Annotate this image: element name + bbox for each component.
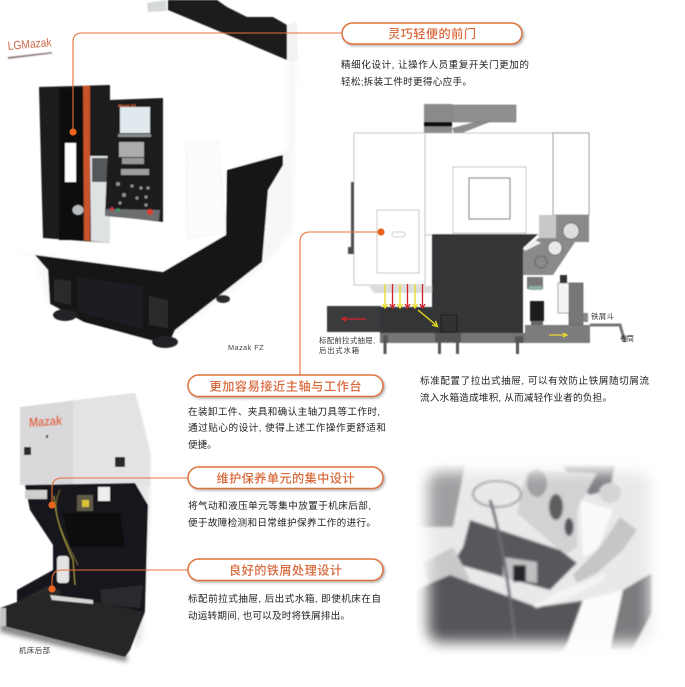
text: access description: 通过贴心的设计, 使得上述工作操作更舒适和: [188, 422, 386, 434]
text: maintenance description: 将气动和液压单元等集中放置于机床后部,: [188, 500, 371, 512]
logo: LGMazak: LGMazak: [7, 35, 53, 53]
connector: chip disposal: [48, 570, 188, 593]
text: access description: 便捷。: [188, 439, 217, 451]
connector: spindle access: [300, 228, 385, 375]
top arm: [424, 104, 516, 133]
tray and body: [327, 234, 538, 343]
flow arrows: [342, 284, 567, 337]
text: maintenance description: 便于故障检测和日常维护保养工作的进行。: [188, 517, 376, 529]
front door window: [39, 85, 110, 243]
diagram labels: 卷筒: [620, 334, 634, 343]
heading: 良好的铁屑处理设计: [188, 559, 383, 580]
heading: 良好的铁屑处理设计: 良好的铁屑处理设计: [229, 562, 342, 578]
cover outline: [354, 133, 589, 285]
diagram labels: 标配前拉式抽屉,: [319, 336, 375, 345]
connector: maintenance unit: [48, 478, 188, 509]
diagram labels: 后出式水箱: [319, 346, 359, 355]
text: drawer description: [420, 375, 649, 404]
text: access description: 在装卸工件、夹具和确认主轴刀具等工作时,: [188, 406, 380, 418]
text: drawer description: 流入水箱造成堆积, 从而减轻作业者的负担。: [420, 392, 612, 404]
heading: 更加容易接近主轴与工作台: [188, 375, 383, 396]
caption: 机床后部: 机床后部: [19, 646, 50, 655]
machine base: [35, 155, 283, 348]
machine photo: rear view: [0, 393, 150, 662]
heading: 维护保养单元的集中设计: [188, 467, 383, 488]
text: chip disposal description: 标配前拉式抽屉, 后出式水箱, 即使机床在自: [188, 593, 381, 605]
filter, motor, tank: [525, 275, 625, 343]
connector: front door: [69, 33, 342, 136]
heading: 灵巧轻便的前门: [342, 23, 522, 44]
text: maintenance description: [188, 500, 376, 529]
photo: operator removing drawer: [415, 460, 660, 655]
diagram labels: [319, 312, 634, 355]
text: drawer description: 标准配置了拉出式抽屉, 可以有效防止铁屑随切屑流: [420, 375, 649, 387]
side diagram of machine: [327, 104, 625, 354]
machine photo: rear view: Mazak: [29, 413, 63, 430]
caption: Mazak FZ: Mazak FZ: [228, 343, 264, 352]
chute: [523, 215, 589, 290]
text: front door description: 轻松;拆装工件时更得心应手。: [341, 76, 472, 88]
heading: 维护保养单元的集中设计: 维护保养单元的集中设计: [216, 470, 354, 486]
text: front door description: 精细化设计, 让操作人员重复开关门更加的: [341, 59, 529, 71]
operation panel: Mazak FZ: [118, 103, 137, 108]
machine photo: Mazak FZ front: [8, 0, 298, 348]
operation panel: [105, 98, 163, 222]
heading: 更加容易接近主轴与工作台: 更加容易接近主轴与工作台: [210, 378, 362, 394]
logo: LGMazak: [7, 35, 53, 59]
diagram labels: 铁屑斗: [591, 312, 614, 321]
feet: [383, 333, 523, 354]
text: access description: [188, 406, 386, 451]
heading: 灵巧轻便的前门: 灵巧轻便的前门: [388, 26, 476, 41]
text: chip disposal description: [188, 593, 381, 622]
text: chip disposal description: 动运转期间, 也可以及时将铁屑排出。: [188, 610, 350, 622]
text: front door description: [341, 59, 529, 88]
